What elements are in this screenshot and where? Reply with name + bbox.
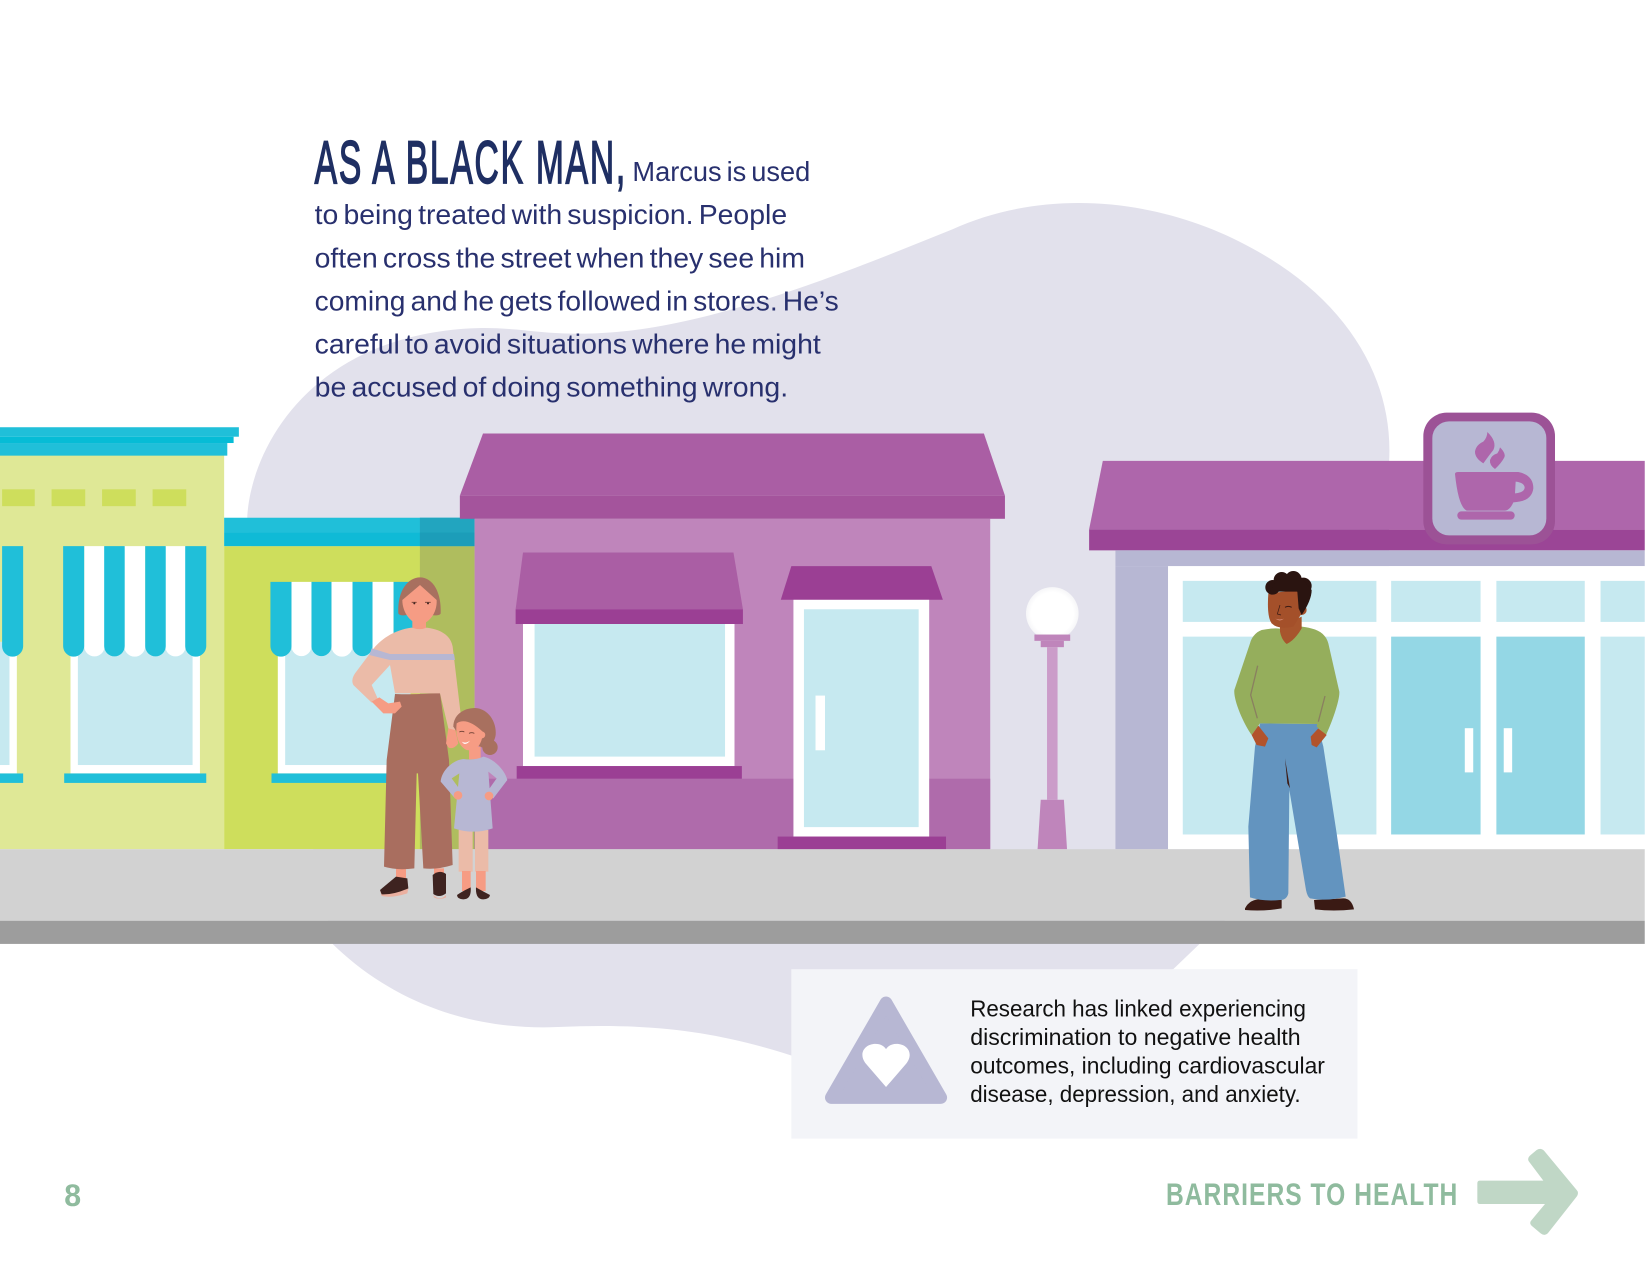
callout text <box>970 996 1325 1107</box>
figure: Marcus <box>1234 571 1354 911</box>
intro paragraph: Marcus is used <box>632 156 810 187</box>
arrow <box>1477 1149 1578 1235</box>
street lamp <box>1026 587 1079 849</box>
sidewalk and road <box>0 849 1645 944</box>
page number: 8 <box>64 1177 81 1213</box>
intro paragraph: careful to avoid situations where he might <box>315 329 821 360</box>
background blob <box>247 203 1389 1055</box>
figure: woman <box>352 577 461 899</box>
figure: girl <box>441 708 507 899</box>
intro paragraph: often cross the street when they see him <box>315 242 805 273</box>
heading and intro text <box>315 130 839 403</box>
heading: AS A BLACK MAN, <box>315 130 625 197</box>
callout text: disease, depression, and anxiety. <box>970 1081 1301 1107</box>
building: purple shop <box>460 434 1005 849</box>
building: pale green shop <box>0 427 239 849</box>
intro paragraph: to being treated with suspicion. People <box>315 199 787 230</box>
icon: triangle with heart <box>831 1003 941 1098</box>
intro paragraph: be accused of doing something wrong. <box>315 372 788 403</box>
callout text: discrimination to negative health <box>970 1024 1301 1050</box>
callout: research <box>791 969 1357 1139</box>
building: lime green shop <box>224 518 475 849</box>
intro paragraph: coming and he gets followed in stores. He’s <box>315 285 839 316</box>
footer section label: BARRIERS TO HEALTH <box>1166 1176 1457 1212</box>
intro paragraph <box>315 156 839 403</box>
cafe sign with coffee cup icon <box>1423 413 1555 544</box>
callout text: Research has linked experiencing <box>970 996 1306 1022</box>
building: cafe <box>1089 461 1645 849</box>
callout text: outcomes, including cardiovascular <box>970 1052 1325 1078</box>
